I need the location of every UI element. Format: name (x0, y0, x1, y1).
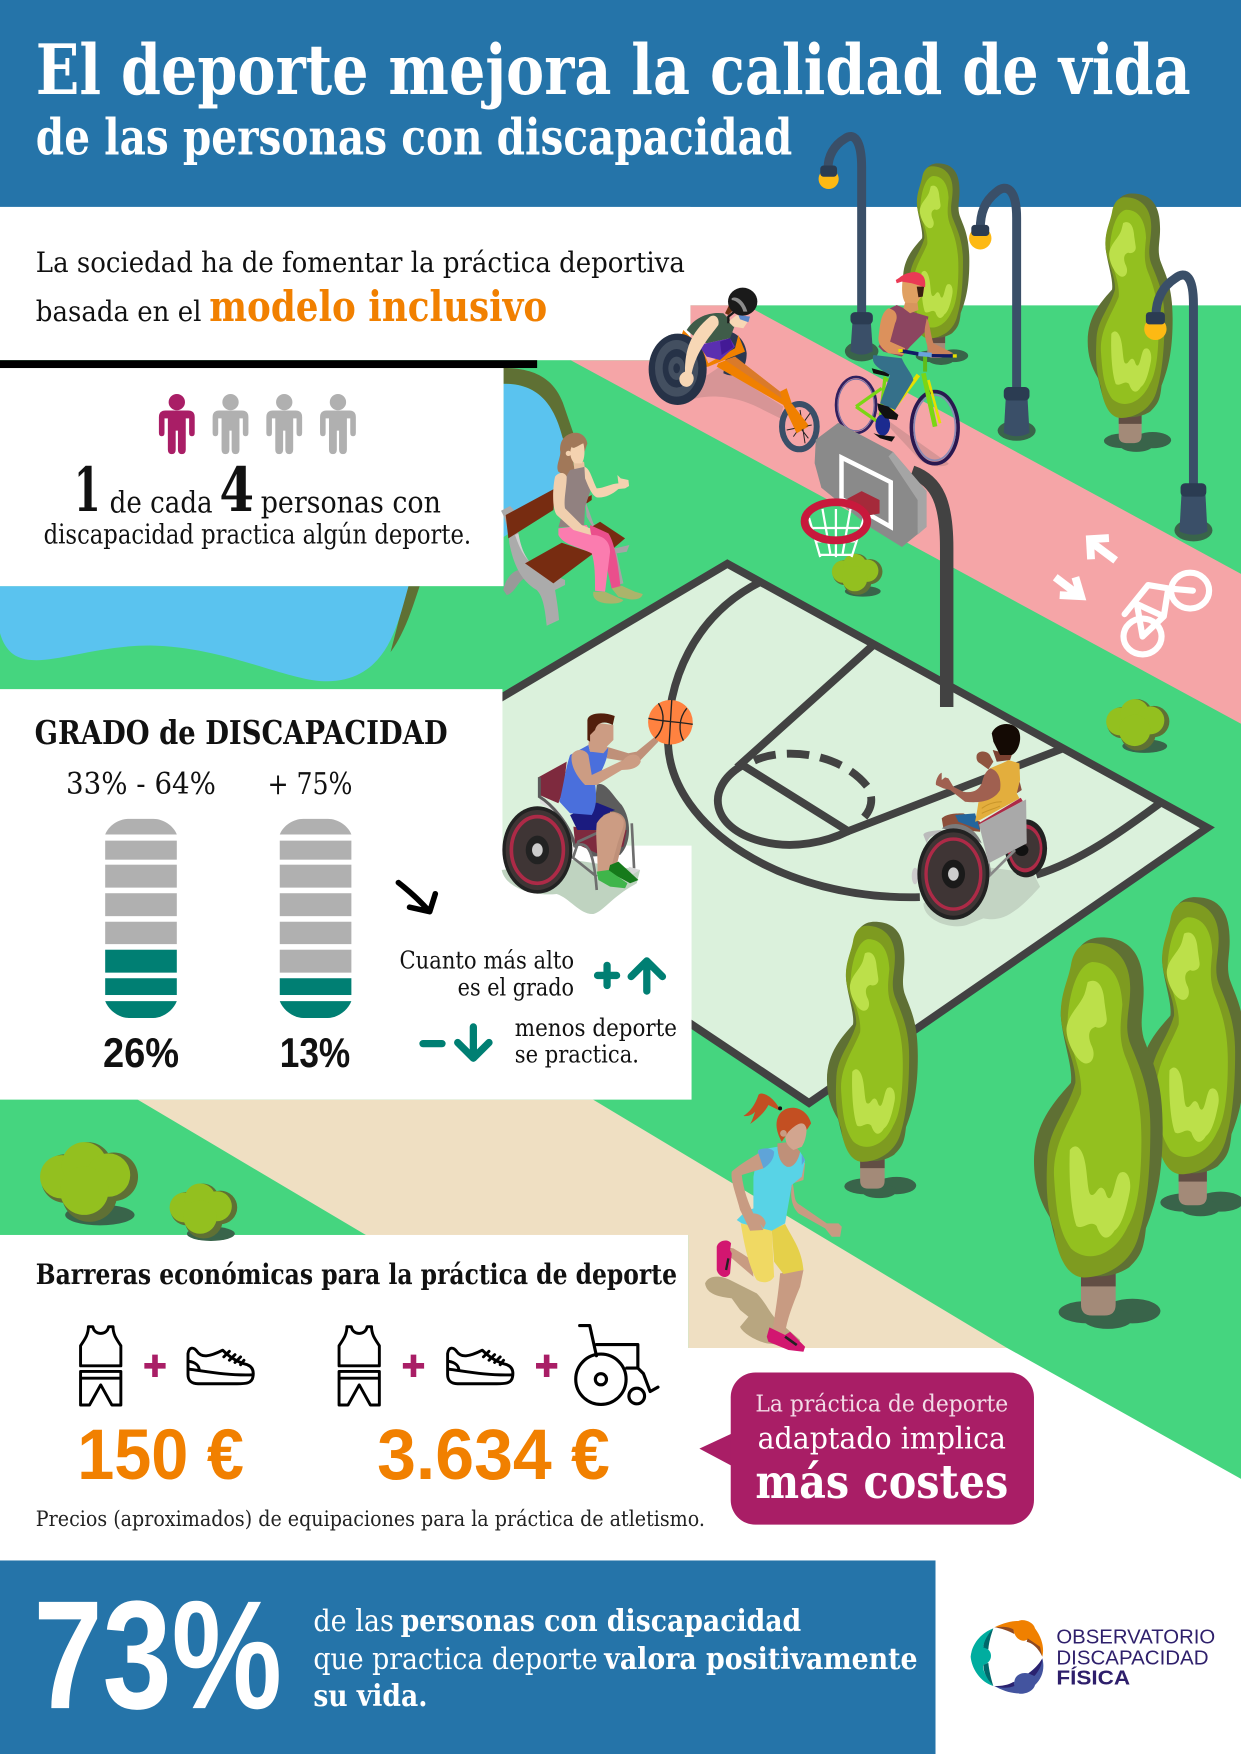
panel: header band (0, 0, 1241, 207)
lamp: second (969, 188, 1036, 441)
lake lower (0, 586, 420, 681)
footer text: valora positivamente (603, 1642, 918, 1677)
panel: 1 de cada 4 (0, 360, 537, 586)
big number 73%: 73% (34, 1568, 282, 1741)
column label 33-64: 33% - 64% (66, 767, 216, 802)
basketball court (448, 564, 1207, 1103)
bush: lower left small (170, 1184, 237, 1241)
statistic sentence: de cada (110, 485, 213, 520)
footer text: de las (313, 1604, 394, 1639)
icon: plus and arrow up (598, 961, 662, 991)
figure: racing wheelchair athlete (649, 288, 817, 449)
heading: GRADO de DISCAPACIDAD (35, 714, 448, 752)
logo text: DISCAPACIDAD (1056, 1648, 1209, 1670)
figure: woman on bench (501, 433, 643, 626)
icon: kit 2 (339, 1327, 379, 1405)
statistic sentence: 4 (219, 455, 254, 526)
icon: shoe 2 (448, 1348, 513, 1384)
price 150: 150 € (77, 1415, 244, 1495)
footer text: que practica deporte (313, 1642, 598, 1677)
tree: top right (1088, 194, 1173, 452)
text: cuanto mas alto: Cuanto más alto (399, 946, 574, 975)
icon: kit 1 (81, 1327, 121, 1405)
title line 2: de las personas con discapacidad (36, 108, 792, 166)
tree: lower right front (1034, 937, 1163, 1329)
arrow: hand drawn (398, 883, 435, 912)
bush: lower left large (40, 1142, 138, 1225)
lamp: third (1144, 275, 1212, 541)
logo text: FÍSICA (1056, 1667, 1130, 1690)
lamp: first (819, 136, 878, 361)
figure: runner (705, 1094, 842, 1352)
footnote: Precios (aproximados) de equipaciones para la práctica de atletismo. (36, 1507, 705, 1532)
panel: barreras economicas (0, 1235, 705, 1560)
icon: bike lane bicycle (1124, 573, 1209, 654)
text: cuanto mas alto (399, 946, 574, 1002)
icon: plus 2 (403, 1355, 424, 1377)
logo text: OBSERVATORIO (1056, 1626, 1215, 1648)
value 13: 13% (280, 1030, 350, 1076)
intro text line 2: basada en el (36, 295, 201, 328)
text: menos deporte: se practica. (515, 1040, 639, 1069)
statistic sentence (44, 455, 471, 551)
bar chart: 13% (280, 819, 351, 1018)
column label 75: + 75% (267, 767, 352, 802)
footer text: su vida. (313, 1679, 427, 1714)
running path (138, 1100, 1007, 1348)
text: menos deporte: menos deporte (515, 1013, 677, 1042)
bush: under hoop (832, 554, 882, 597)
intro text line 1: La sociedad ha de fomentar la práctica deportiva (36, 246, 685, 279)
tree: top centre (903, 163, 969, 365)
hoop: backboard post and rim (805, 423, 947, 707)
icons: four people (159, 394, 356, 454)
tree: lower right back (1140, 897, 1241, 1216)
icon: bike lane direction arrows (1055, 538, 1116, 596)
icon: plus 3 (536, 1355, 557, 1377)
callout: mas costes: adaptado implica (758, 1422, 1006, 1457)
icon: wheelchair (576, 1326, 658, 1404)
callout: mas costes: La práctica de deporte (755, 1390, 1008, 1418)
highlight: modelo inclusivo: modelo inclusivo (209, 282, 547, 332)
lake upper (504, 368, 576, 537)
bar chart: 26% (105, 819, 177, 1018)
panel: intro (0, 207, 690, 360)
logo: Observatorio Discapacidad Fisica (971, 1620, 1215, 1694)
footer text (313, 1604, 918, 1714)
logo mark (971, 1620, 1043, 1694)
icon: plus 1 (144, 1355, 166, 1377)
text: cuanto mas alto: es el grado (458, 973, 574, 1002)
statistic sentence: discapacidad practica algún deporte. (44, 520, 471, 551)
figure: wheelchair player rear view (912, 724, 1047, 926)
figure: cyclist (836, 272, 958, 466)
panel: footer statistic (0, 1560, 936, 1754)
price 3634: 3.634 € (377, 1415, 610, 1495)
footer text: personas con discapacidad (401, 1604, 801, 1639)
bike lane (571, 305, 1241, 724)
panel: grado de discapacidad (0, 689, 692, 1100)
bush: court right (1106, 699, 1169, 753)
value 26: 26% (103, 1030, 179, 1076)
callout: mas costes: más costes (755, 1455, 1008, 1510)
heading: Barreras económicas para la práctica de deporte (36, 1258, 677, 1291)
statistic sentence: personas con (261, 485, 441, 520)
figure: wheelchair player with ball (502, 700, 693, 914)
logo text (1056, 1626, 1215, 1690)
text: menos deporte (515, 1013, 677, 1069)
tree: court centre (827, 922, 918, 1198)
callout: mas costes (699, 1373, 1034, 1525)
icon: minus and arrow down (423, 1027, 489, 1058)
icon: shoe 1 (188, 1348, 253, 1384)
statistic sentence: 1 (74, 455, 101, 526)
